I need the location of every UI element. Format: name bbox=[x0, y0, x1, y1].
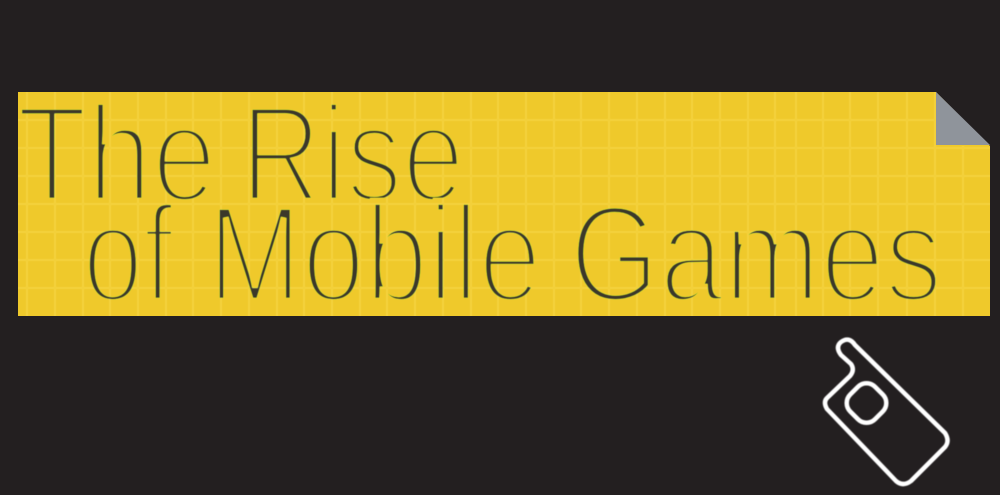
title: of bbox=[82, 177, 174, 331]
title: Rise bbox=[240, 77, 464, 231]
banner bbox=[18, 92, 990, 316]
title: The bbox=[16, 77, 216, 231]
page fold corner bbox=[936, 92, 990, 145]
icon: mobile phone bbox=[825, 340, 948, 484]
title bbox=[16, 77, 942, 331]
title: Mobile bbox=[208, 177, 542, 331]
